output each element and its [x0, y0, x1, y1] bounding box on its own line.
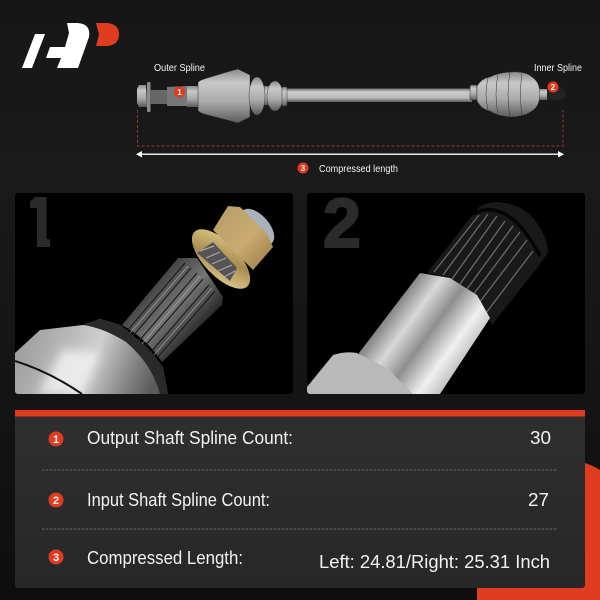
row 3: Left: 24.81/Right: 25.31 Inch — [319, 552, 550, 572]
length bracket — [138, 110, 563, 146]
panel number 1: 1 — [26, 182, 54, 267]
threaded section — [197, 242, 237, 281]
row 2: 2 — [53, 495, 59, 507]
inner spline label: Inner Spline — [534, 63, 582, 74]
logo — [22, 23, 119, 68]
row 2: Input Shaft Spline Count: — [87, 490, 270, 510]
row 3 — [48, 548, 550, 572]
CV joint body — [15, 319, 168, 394]
photo panel 2 — [307, 184, 585, 394]
row 1 — [48, 428, 551, 448]
axle shaft — [285, 88, 472, 102]
row 2: 27 — [528, 490, 549, 510]
badge 2: 2 — [551, 83, 556, 92]
outer spline label: Outer Spline — [154, 63, 205, 74]
red corner shape — [477, 463, 600, 600]
hex nut — [213, 206, 273, 270]
spline section — [122, 258, 223, 362]
badge 1: 1 — [177, 88, 182, 97]
photo panel 1 — [15, 182, 293, 394]
outer threads — [150, 90, 167, 104]
outer collar — [187, 86, 199, 107]
outer boot — [249, 77, 287, 115]
inner collar — [540, 89, 547, 100]
inner spline tip — [547, 87, 566, 100]
row 1: 30 — [530, 428, 551, 448]
row 3: 3 — [53, 552, 59, 564]
spec table panel — [15, 410, 585, 588]
outer nut and flange — [137, 82, 150, 112]
nut end cap — [243, 208, 274, 244]
badge 3: 3 — [301, 164, 306, 173]
row 1: 1 — [53, 434, 59, 446]
panel number 2: 2 — [323, 184, 361, 262]
inner boot — [470, 72, 540, 117]
length arrow — [136, 151, 564, 158]
axle diagram — [136, 63, 582, 175]
row 2 — [48, 490, 549, 510]
outer spline — [167, 86, 187, 106]
lower flange — [307, 352, 413, 394]
outer CV housing — [198, 69, 250, 123]
badge 2 — [548, 82, 558, 92]
washer — [192, 229, 250, 289]
badge 1 — [174, 86, 185, 98]
row 3: Compressed Length: — [87, 548, 243, 568]
compressed length label: Compressed length — [319, 164, 398, 175]
badge 3 — [298, 162, 308, 174]
row 1: Output Shaft Spline Count: — [87, 428, 293, 448]
red header bar — [15, 410, 585, 416]
splined end — [427, 202, 548, 325]
chrome cylinder — [359, 273, 490, 394]
